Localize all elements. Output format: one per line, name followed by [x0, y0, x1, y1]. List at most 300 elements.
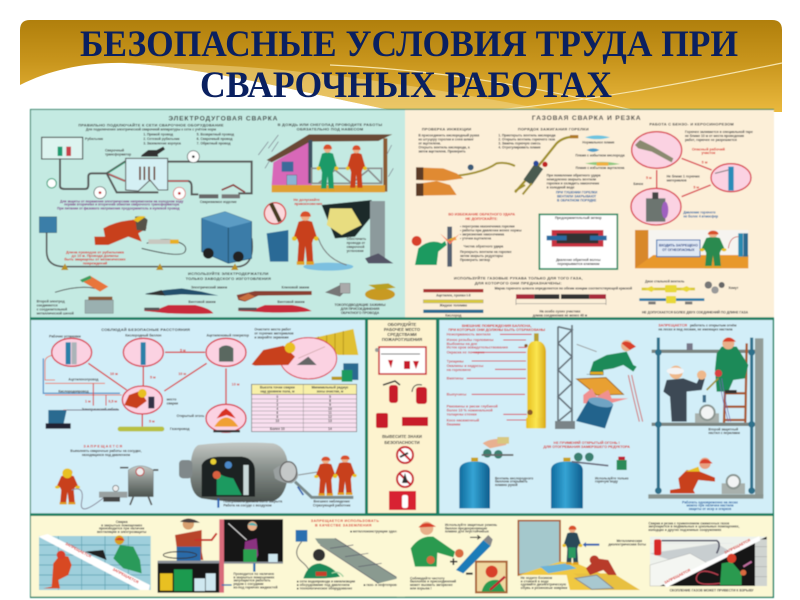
- text: cutter notes: [633, 130, 753, 218]
- heading: damaged cylinder: ВНЕШНИЕ ПОВРЕЖДЕНИЯ БАЛЛОНА,: [462, 324, 532, 328]
- text: ignition order: 2. Открыть вентиль горючего газа: [498, 137, 555, 141]
- distance diagram: Электрический кабель: [82, 407, 119, 411]
- blue cylinder with hand: Вентиль кислородного: [495, 476, 533, 480]
- panel: bottom strip right: [397, 516, 773, 597]
- text: flame notes: ВЕНТИЛИ ЗАКРЫВАЮТ: [557, 195, 596, 199]
- heading: gas hoses: ИСПОЛЬЗУЙТЕ ГАЗОВЫЕ РУКАВА ТОЛЬКО ДЛЯ ТОГО ГАЗА,: [454, 275, 583, 280]
- distance diagram: Газопровод: [170, 427, 190, 431]
- distance diagram: Открытый огонь: [177, 414, 204, 418]
- big tank: Внешнее наблюдение: [314, 499, 350, 503]
- text: confined space: вентиляции и электрозащиты: [97, 530, 147, 534]
- text: red warning: Длина проводов от рубильника: [66, 250, 125, 254]
- no oily clothes room: ВХОДИТЬ ЗАПРЕЩЕНО: [659, 243, 698, 247]
- text: connection instructions: 6. Сварочный провод: [197, 137, 233, 141]
- crouching worker: [670, 458, 745, 494]
- safety valve box: перекрывается клапаном: [557, 262, 600, 266]
- backfire warning: ВО ИЗБЕЖАНИЕ ОБРАТНОГО УДАРА: [448, 213, 515, 217]
- distance diagram: Ацетиленопровод: [68, 377, 99, 381]
- welder near heater: [252, 328, 358, 382]
- text: connection instructions: 3. Заземление корпуса: [143, 141, 181, 145]
- text: flame notes: [547, 173, 601, 203]
- flooded floor scene: одевайте диэлектрическую: [521, 583, 566, 587]
- yellow cylinder with defects: башмак: [447, 422, 461, 426]
- worker with cylinder: [410, 522, 497, 590]
- prohibition heading: находящихся под давлением: [82, 453, 131, 457]
- dark room worker: запрещается работать: [233, 579, 271, 583]
- text: cutter notes: не ближе 10 м от места проведения: [685, 134, 744, 138]
- blue cylinder with heater: НЕ ПРИМЕНЯЙ ОТКРЫТЫЙ ОГОНЬ !: [554, 441, 620, 445]
- text: injection check: от ацетилена.: [418, 141, 441, 145]
- do not hold torch scene: Не допускайте: [293, 198, 320, 202]
- electrode holder tools: Электрический зажим: [191, 285, 228, 289]
- heading: arc welding: ЭЛЕКТРОДУГОВАЯ СВАРКА: [168, 115, 278, 122]
- sign: fire extinguisher: [389, 491, 416, 510]
- distance diagram: 5 м: [150, 375, 156, 379]
- two firefighters: [314, 455, 357, 496]
- distance diagram: 5 м: [693, 185, 699, 189]
- heading: electrode holders: ТОЛЬКО ЗАВОДСКОГО ИЗГОТОВЛЕНИЯ: [186, 276, 271, 281]
- big tank: Работа на сосуде с воздухом: [223, 504, 272, 508]
- title: БЕЗОПАСНЫЕ УСЛОВИЯ ТРУДА ПРИ: [80, 24, 738, 65]
- text: red warning: [64, 250, 126, 265]
- hoses chart: длина соединения не менее 40 м: [533, 313, 588, 317]
- text: cutter notes: участок: [701, 151, 716, 155]
- distance table: [252, 384, 357, 432]
- hoses chart: [423, 286, 632, 318]
- rail grounding welder: ■ оборудование под давлением: [297, 583, 350, 587]
- text: injection check: [418, 126, 479, 153]
- distance diagram: 1 м: [85, 399, 91, 403]
- do not hold torch scene: Обесточить: [347, 237, 366, 241]
- poster frame: [30, 109, 774, 598]
- do not hold torch scene: прикосновения: [294, 202, 322, 206]
- electrode holder tools: Винтовой зажим: [188, 300, 216, 304]
- text: injection check: В присоединить кислородный рукав: [418, 133, 479, 137]
- yellow cylinder with defects: Трещины: [447, 359, 464, 363]
- panel: electric arc welding: [31, 110, 405, 317]
- heading: fire equipment: [382, 322, 422, 342]
- distance table: 4: [276, 407, 278, 411]
- title band: [20, 20, 782, 112]
- text: scaffold warning: [658, 323, 737, 331]
- dark room worker: рядом с сосудами: [233, 582, 263, 586]
- yellow cylinder with defects: Окраска не по норме: [447, 351, 485, 355]
- gas torch with hands: [416, 163, 515, 196]
- yellow cylinder with defects: Косо насаженный: [447, 418, 479, 422]
- text: flame notes: горелки и охладить наконечник: [547, 181, 599, 185]
- yellow cylinder with defects: Вмятины: [447, 377, 464, 381]
- rail grounding welder: [296, 530, 404, 590]
- circuit diagram: трансформатор: [105, 153, 131, 157]
- heading: safety signs: ВЫВЕСИТЕ ЗНАКИ: [382, 434, 422, 439]
- text: cutter notes: работ, горючее не разрешается: [685, 138, 737, 142]
- text: flame notes: В ОБРАТНОМ ПОРЯДКЕ: [557, 199, 597, 203]
- distance diagram: 5 м: [149, 419, 155, 423]
- text: scaffold warning: ЗАПРЕЩАЕТСЯ: [658, 323, 687, 327]
- distance diagram: место: [167, 398, 176, 402]
- distance table: Минимальный радиус: [312, 385, 349, 389]
- text: no grounding through: ■ металлоконструкции здания: [350, 530, 400, 534]
- heading: fire equipment: ПОЖАРОТУШЕНИЯ: [382, 337, 422, 342]
- distance table: зоны очистки, м: [317, 389, 344, 393]
- torch and flames: Нормальное пламя: [582, 141, 614, 145]
- distance diagram: 10 м: [110, 372, 118, 376]
- yellow cylinder with defects: [447, 333, 546, 428]
- prohibition heading: ЗАПРЕЩАЕТСЯ: [83, 444, 123, 448]
- battery and clamp: металлической шиной: [37, 311, 74, 315]
- welder near heater: Очистите место работ: [254, 328, 291, 332]
- prohibition heading: Выполнять сварочные работы на сосудах,: [70, 449, 142, 453]
- circuit diagram: Сварочный: [105, 149, 124, 153]
- heading: safety signs: БЕЗОПАСНОСТИ: [384, 440, 420, 445]
- yellow cylinder with defects: Выпучины: [447, 393, 466, 397]
- fire board: [375, 347, 426, 374]
- heading: fire equipment: ОБОРУДУЙТЕ: [388, 322, 417, 327]
- distance diagram: [631, 132, 751, 225]
- heading: damaged cylinder: ПРИ КОТОРЫХ ОНИ ДОЛЖНЫ БЫТЬ ОТБРАКОВАНЫ: [448, 328, 545, 332]
- text: no grounding through: В КАЧЕСТВЕ ЗАЗЕМЛЕНИЯ: [315, 523, 372, 527]
- hose connections: Двое стальной вентиль: [645, 280, 684, 284]
- backfire warning: • загрязнения наконечника: [460, 233, 504, 237]
- yellow cylinder with defects: Неисправность вентиля: [447, 333, 491, 337]
- distance table: Более 10: [270, 427, 285, 431]
- blue cylinder with heater: [543, 441, 630, 508]
- worker with cylinder: Используйте защитные ремень: [445, 523, 497, 527]
- distance diagram: 5 м: [180, 349, 186, 353]
- text: no grounding through: ЗАПРЕЩАЕТСЯ ИСПОЛЬЗОВАТЬ: [311, 519, 379, 523]
- hoses chart: Марка горючего шланга определяется по обеим концам соответствующей краской: [495, 286, 632, 290]
- heading: safety signs: [382, 434, 422, 445]
- flooded floor scene: и стоячей в воде: [521, 579, 549, 583]
- battery and clamp: соединяется: [37, 303, 58, 307]
- distance table: 6: [276, 411, 278, 415]
- no oily clothes room: [635, 230, 748, 268]
- worker on ladder: [703, 337, 748, 422]
- dark room worker: из-под горючих жидкостей: [233, 585, 278, 589]
- heading: safe distances: СОБЛЮДАЙ БЕЗОПАСНЫЕ РАССТОЯНИЯ: [101, 327, 190, 332]
- canopy scene: [258, 134, 393, 192]
- circuit diagram: Рубильник: [85, 137, 103, 141]
- flooded floor scene: Не ходите босиком: [521, 576, 553, 580]
- text: red warning: быть защищены от механических: [64, 258, 126, 262]
- distance diagram: 10 м: [178, 372, 186, 376]
- hose connections: Хомут: [728, 286, 739, 290]
- text: ignition order: 4. Отрегулировать пламя: [498, 145, 540, 149]
- heading: gas hoses: [454, 275, 583, 285]
- text: cutter notes: Опасный рабочий: [692, 147, 725, 151]
- worker with cylinder: или взрыва !: [410, 586, 432, 590]
- yellow cylinder with defects: Износ резьбы горловины: [447, 338, 493, 342]
- text: flammable gas notes: колодцах и других подземных сооружениях: [648, 528, 722, 532]
- safety valve box: [539, 214, 617, 269]
- yellow cylinder with defects: на горловине: [447, 368, 471, 372]
- welder on tanks: [158, 518, 219, 593]
- distance table: 10: [328, 407, 332, 411]
- welder near heater: и закройте экранами: [254, 336, 289, 340]
- distance diagram: Кислородный баллон: [125, 333, 161, 337]
- circuit diagram: [42, 137, 252, 204]
- big tank: Страхующий работник: [313, 503, 351, 507]
- kneeling welder scene: [39, 212, 252, 270]
- distance table: 8: [276, 415, 278, 419]
- text: flammable gas notes: Сварка и резка с применением сжиженных газов: [648, 521, 729, 525]
- text: scaffold footnote: можно при наличии настила: [686, 504, 734, 508]
- text: red warning: до 10 м. Провода должны: [72, 254, 118, 258]
- yellow cylinder with defects: Раковины и риски глубиной: [447, 405, 498, 409]
- backfire warning: • работы при давлении менее нормы: [460, 229, 522, 233]
- worker with cylinder: баллон предохраняющие: [445, 526, 487, 530]
- distance table: 14: [328, 427, 332, 431]
- backfire warning: затем закрыть редукторы: [460, 254, 503, 258]
- circuit diagram: Свариваемое изделие: [200, 200, 237, 204]
- backfire warning: Чистка обратного удара: [463, 245, 503, 249]
- text: transformer notes: При питании от фазового напряжения предохранитель и нулевой провод: [57, 207, 180, 211]
- safety valve box: Предохранительный затвор: [555, 216, 602, 220]
- backfire warning: • перегрева наконечника горелки: [460, 225, 515, 229]
- title: СВАРОЧНЫХ РАБОТАХ: [200, 65, 612, 106]
- text: scaffold footnote: защиты от искр и огарков: [689, 507, 731, 511]
- hoses chart: Ацетилен, пропан I-II: [436, 293, 471, 297]
- text: connection instructions: ПРАВИЛЬНО ПОДКЛЮЧАЙТЕ К СЕТИ СВАРОЧНОЕ ОБОРУДОВАНИЕ: [78, 122, 224, 127]
- distance table: 13: [328, 419, 332, 423]
- backfire warning: НЕ ДОПУСКАЙТЕ:: [465, 217, 498, 221]
- dark room worker: Проводится по наличию: [233, 572, 274, 576]
- text: scaffold warning: на лесах и под лесами, не имеющих настила: [658, 327, 733, 331]
- prohibition heading: [70, 444, 142, 457]
- flooded floor scene: диэлектрическая боты: [608, 542, 646, 546]
- text: connection instructions: [78, 122, 235, 145]
- worker with cylinder: может вызвать загорание: [410, 583, 453, 587]
- distance table: над уровнем пола, м: [260, 389, 295, 393]
- safety poster: [30, 109, 774, 598]
- distance diagram: 10 м: [232, 383, 240, 387]
- flooded floor scene: обувь и резиновые коврики: [521, 586, 567, 590]
- distance diagram: Кислородопровод: [58, 389, 90, 393]
- rail grounding welder: ■ газо- и нефтепроводы: [363, 583, 404, 587]
- flooded floor scene: [518, 521, 646, 590]
- battery and clamp: Второй электрод: [37, 299, 66, 303]
- do not hold torch scene: [264, 198, 393, 271]
- text: confined space: производится при наличии: [99, 527, 144, 531]
- sign: no open flame: [397, 471, 413, 487]
- blue cylinder with heater: горячую воду: [595, 480, 618, 484]
- distance diagram: 5 м: [702, 161, 708, 165]
- dark room worker: [219, 519, 283, 593]
- grounding clamps: ТОКОПОДВОДЯЩИЕ ЗАЖИМЫ: [335, 303, 386, 307]
- grounding clamps: ДЛЯ ПРИСОЕДИНЕНИЯ: [341, 307, 380, 311]
- panel: fire fighting means: [368, 320, 436, 513]
- rail grounding welder: ■ технологическое оборудование: [297, 586, 352, 590]
- distance table: 9: [329, 403, 331, 407]
- blue cylinder with hand: плавно рукой: [495, 483, 518, 487]
- text: injection check: затем ацетилена. Проверить: [418, 149, 466, 153]
- distance diagram: Ацетиленовый генератор: [206, 333, 249, 337]
- heading: gasoline cutter: РАБОТА С БЕНЗО- И КЕРОСИНОРЕЗОМ: [649, 122, 734, 127]
- heading: electrode holders: ИСПОЛЬЗУЙТЕ ЭЛЕКТРОДЕРЖАТЕЛИ: [188, 271, 269, 276]
- distance table: 0: [276, 395, 278, 399]
- falling worker: [577, 340, 643, 422]
- prohibited welding on wall: [38, 534, 151, 590]
- welder at pressure vessel: [55, 466, 158, 509]
- foreman worker: [663, 343, 740, 435]
- text: flammable gas notes: [648, 521, 739, 532]
- distance table: 11: [328, 411, 332, 415]
- panel: gas cylinders and scaffold: [439, 320, 773, 513]
- heading: gas hoses: ДЛЯ КОТОРОГО ОНИ ПРЕДНАЗНАЧЕНЫ:: [475, 280, 562, 285]
- yellow cylinder with defects: Окалины и надрезы: [447, 364, 483, 368]
- do not hold torch scene: установки: [347, 249, 364, 253]
- yellow cylinder with defects: Выбоины на дне: [447, 342, 477, 346]
- worker with cylinder: плавно для неустойчивых: [445, 530, 489, 534]
- panel: safe distances: [31, 320, 365, 513]
- backfire warning: • утечки ацетилена: [460, 237, 491, 241]
- battery and clamp: с соединительной: [37, 307, 67, 311]
- text: flame notes: При появлении обратного удара: [547, 173, 601, 177]
- panel: gas welding and cutting: [405, 110, 774, 318]
- flooded floor scene: Металлическая: [617, 539, 642, 543]
- hoses chart: Кислород: [445, 314, 462, 318]
- text: cutter notes: Бачок: [633, 182, 643, 186]
- yellow cylinder with defects: толщины стенки: [447, 412, 477, 416]
- heading: fire equipment: СРЕДСТВАМИ: [387, 332, 417, 337]
- sign: no smoking: [397, 447, 413, 463]
- generator: [46, 410, 118, 429]
- torch and flames: [515, 135, 625, 194]
- prohibited welding on wall: ЗАПРЕЩАЕТСЯ: [65, 542, 92, 559]
- hoses chart: На особо сухих участках: [540, 309, 581, 313]
- dark room worker: в закрытых помещениях: [233, 575, 275, 579]
- welder near heater: от горючих материалов: [254, 332, 294, 336]
- backfire warning: [448, 213, 522, 262]
- grounding clamps: ОБРАТНОГО ПРОВОДА: [341, 311, 380, 315]
- no gas basement scene: ЗАПРЕЩАЕТСЯ: [724, 538, 751, 555]
- text: confined space: Сварка: [116, 520, 128, 524]
- text: cutter notes: не более 4 атмосфер: [683, 214, 718, 218]
- big tank: Поверхность должна быть закрыта: [223, 500, 282, 504]
- heading: electrode holders: [186, 271, 271, 281]
- text: rain notice: [278, 122, 382, 132]
- electrode holder tools: [144, 285, 312, 314]
- text: injection check: ко штуцеру горелки и сняв шланг: [418, 137, 474, 141]
- foreman worker: настил с перилами: [708, 431, 740, 435]
- worker with cylinder: баллонов и присоединений: [410, 580, 456, 584]
- text: flammable gas notes: запрещается в подвальных и цокольных помещениях,: [648, 525, 739, 529]
- heading: gas welding: ГАЗОВАЯ СВАРКА И РЕЗКА: [532, 115, 641, 122]
- electrode holder tools: Клиновой зажим: [282, 285, 310, 289]
- distance diagram: 5 м: [646, 176, 652, 180]
- heading: damaged cylinder: [448, 324, 545, 332]
- grounding clamps: [325, 283, 396, 315]
- text: connection instructions: Для подключения электрической сварочной аппаратуры к сети с учётом норм: [86, 128, 217, 132]
- yellow cylinder with defects: Истек срок освидетельствования: [447, 346, 508, 350]
- title: [80, 24, 738, 106]
- distance table: 8: [329, 399, 331, 403]
- text: injection check: ПРОВЕРКА ИНЖЕКЦИИ: [422, 126, 471, 131]
- distance table: 3: [276, 403, 278, 407]
- text: rain notice: ОБЯЗАТЕЛЬНО ПОД НАВЕСОМ: [297, 127, 364, 132]
- do not hold torch scene: провода от: [347, 241, 366, 245]
- text: scaffold footnote: Работать одновременно на лесах: [682, 500, 738, 504]
- text: confined space: [97, 520, 147, 534]
- yellow cylinder with defects: более 10 % номинальной: [447, 409, 493, 413]
- text: no grounding through: [311, 519, 400, 534]
- text: ignition order: ПОРЯДОК ЗАЖИГАНИЯ ГОРЕЛКИ: [518, 126, 589, 131]
- text: connection instructions: 2. Сетевой рубильник: [143, 137, 180, 141]
- backfire worker: [412, 227, 460, 267]
- text: confined space: в закрытых помещениях: [101, 523, 142, 527]
- distance diagram: [43, 333, 249, 432]
- safety valve box: Давление обратной волны: [556, 258, 601, 262]
- distance table: 10: [275, 419, 279, 423]
- lattice tower: [555, 325, 575, 429]
- text: red warning: повреждений: [83, 261, 107, 265]
- electrode holder tools: Винтовой зажим: [277, 300, 305, 304]
- hose connections: [639, 280, 749, 314]
- text: injection check: Открыть вентиль кислорода, а: [418, 145, 470, 149]
- extinguishers: [376, 381, 428, 428]
- distance diagram: сварки: [167, 402, 178, 406]
- text: flame notes: немедленно закрыть вентили: [547, 177, 596, 181]
- heading: fire equipment: РАБОЧЕЕ МЕСТО: [384, 327, 421, 332]
- framed worker: [476, 562, 507, 592]
- no gas basement scene: СКОПЛЕНИЕ ГАЗОВ МОЖЕТ ПРИВЕСТИ К ВЗРЫВУ: [670, 588, 755, 592]
- distance table: 2: [276, 399, 278, 403]
- no gas basement scene: ЗАПРЕЩАЕТСЯ: [664, 568, 691, 585]
- distance diagram: Рабочие установки: [49, 335, 81, 339]
- text: scaffold footnote: [682, 500, 738, 511]
- text: connection instructions: 7. Обратный провод: [197, 141, 231, 145]
- blue cylinder with heater: Используйте только: [595, 476, 629, 480]
- text: scaffold warning: работать с открытым огнём: [690, 323, 737, 327]
- torch and flames: Пламя с избытком ацетилена: [576, 166, 625, 170]
- text: connection instructions: 5. Возвратный провод: [197, 133, 235, 137]
- big tank: [179, 442, 353, 508]
- battery and clamp: [37, 276, 113, 315]
- text: rain notice: В ДОЖДЬ ИЛИ СНЕГОПАД ПРОВОДИТЕ РАБОТЫ: [278, 122, 382, 127]
- no gas basement scene: [650, 536, 767, 592]
- worker with cylinder: Соблюдайте чистоту: [410, 576, 445, 580]
- text: transformer notes: [57, 199, 183, 211]
- distance diagram: 0,5 м: [108, 399, 117, 403]
- pallet, flame and barrel: [576, 378, 628, 428]
- backfire warning: Проверить затвор: [460, 258, 490, 262]
- text: connection instructions: 1. Прямой провод: [143, 133, 174, 137]
- hoses chart: Жидкое топливо: [439, 304, 467, 308]
- no oily clothes room: ОТ ОГНЕОПАСНЫХ: [662, 248, 695, 252]
- distance table: 5: [329, 395, 331, 399]
- backfire warning: Перекрыть вентили на горелке: [460, 250, 512, 254]
- torch and flames: Пламя с избытком кислорода: [575, 153, 625, 157]
- text: ignition order: 3. Зажечь горючую смесь: [498, 141, 541, 145]
- blue cylinder with heater: ДЛЯ ОТОГРЕВАНИЯ ЗАМЕРЗШЕГО РЕДУКТОРА: [543, 445, 630, 449]
- distance table: 12: [328, 415, 332, 419]
- prohibited welding on wall: ЗАПРЕЩАЕТСЯ: [112, 567, 139, 585]
- hose connections: НЕ ДОПУСКАЕТСЯ БОЛЕЕ ДВУХ СОЕДИНЕНИЙ ПО ДЛИНЕ ГАЗА: [642, 310, 749, 314]
- text: cutter notes: Давление горючего: [683, 210, 716, 214]
- distance table: Высота точки сварки: [260, 385, 295, 389]
- text: cutter notes: Горючее заливается в специальной таре: [685, 130, 753, 134]
- panel: bottom strip left: [31, 516, 405, 597]
- text: flame notes: в холодной воде: [547, 185, 575, 189]
- text: cutter notes: Не ближе 1 горючих: [667, 175, 700, 179]
- text: transformer notes: Для защиты от поражения электрическим напряжением на холодном ходу: [60, 199, 183, 203]
- text: ignition order: [498, 126, 589, 149]
- text: cutter notes: материалов: [667, 179, 687, 183]
- text: flame notes: ПРИ ТУШЕНИИ ГОРЕЛКИ: [556, 191, 598, 195]
- blue cylinder with hand: баллона открывать: [495, 480, 528, 484]
- scaffold: [648, 338, 763, 499]
- blue cylinder with hand: [459, 437, 533, 508]
